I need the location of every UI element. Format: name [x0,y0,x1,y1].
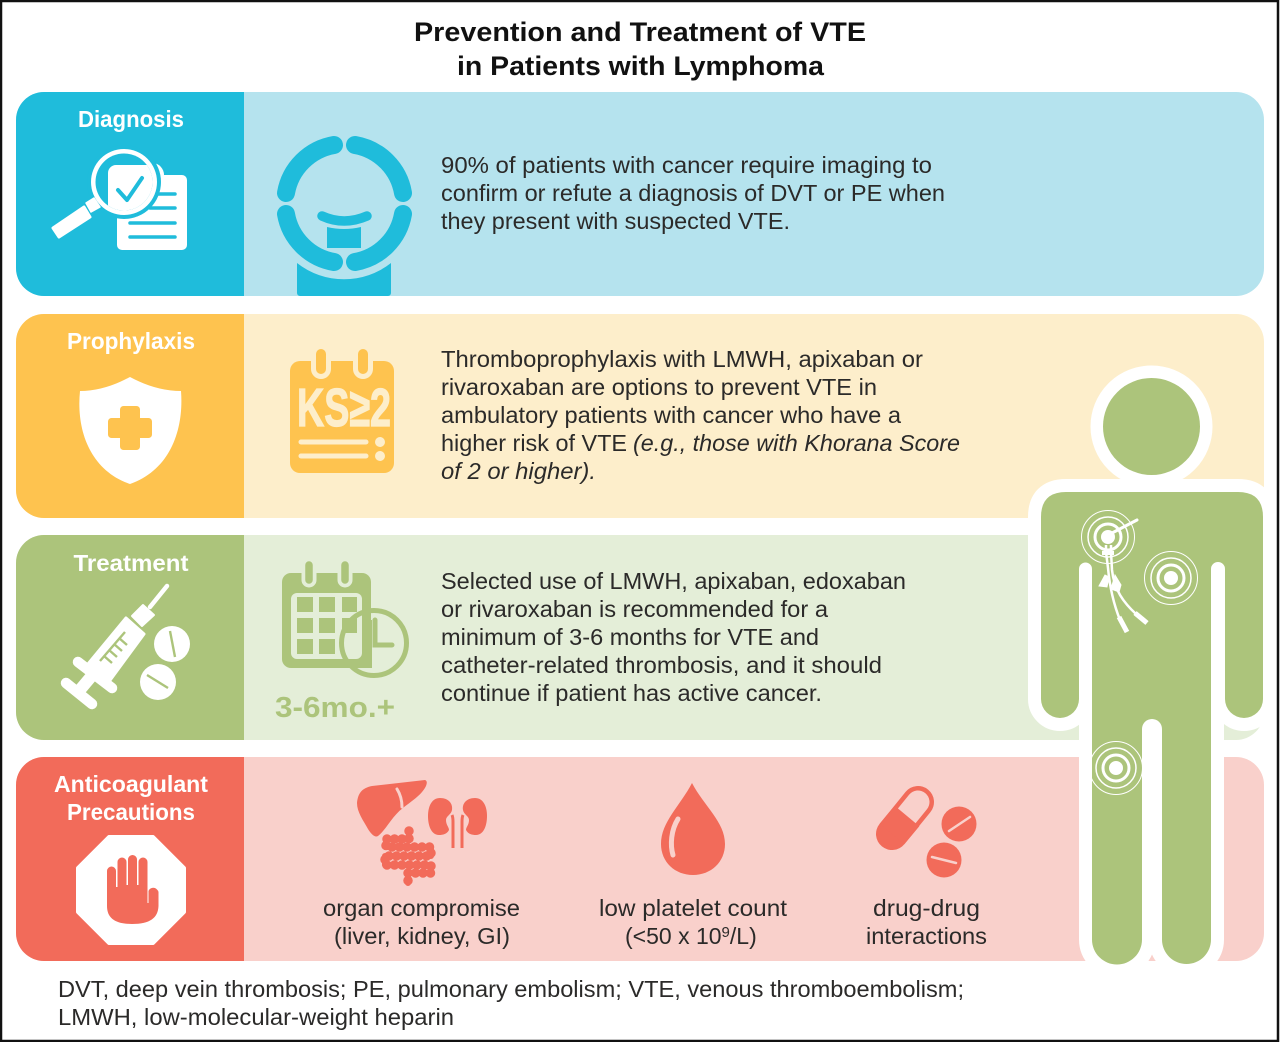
text: treatment: or rivaroxaban is recommended for a [441,596,828,622]
icon: liver, kidneys, intestine [357,780,487,883]
text: diagnosis: confirm or refute a diagnosis of DVT or PE when [441,180,945,206]
heading: anticoagulant precautions: Precautions [67,799,195,825]
icon: syringe and pills [66,586,190,704]
heading: treatment: Treatment [74,550,189,576]
text: prophylaxis: of 2 or higher). [441,458,596,484]
text: drug-drug interactions: interactions [866,923,987,949]
title: in Patients with Lymphoma [457,51,825,81]
title: Prevention and Treatment of VTE [414,17,866,47]
text: low platelet count: 9 [722,924,730,941]
title [414,17,866,81]
icon: calendar Khorana score: KS≥2 [297,378,391,438]
text: treatment: catheter-related thrombosis, and it should [441,652,882,678]
text: diagnosis: 90% of patients with cancer require imaging to [441,152,932,178]
heading: diagnosis: Diagnosis [78,106,184,132]
text: treatment: minimum of 3-6 months for VTE and [441,624,819,650]
body: head [1103,378,1200,475]
text: prophylaxis: ambulatory patients with cancer who have a [441,402,901,428]
heading: anticoagulant precautions: Anticoagulant [54,771,208,797]
icon: magnifier over document [53,145,187,250]
panel: treatment [16,535,1264,740]
icon: stop sign with hand [78,837,184,943]
figure: patient body with thrombosis sites [1041,378,1263,964]
icon: blood drop [661,783,725,875]
footnote: DVT, deep vein thrombosis; PE, pulmonary embolism; VTE, venous thromboembolism; [58,976,964,1002]
panel: diagnosis [16,92,1264,296]
label: duration: 3-6mo.+ [275,692,395,724]
icon: calendar and clock [282,565,406,676]
text: prophylaxis: rivaroxaban are options to prevent VTE in [441,374,877,400]
thrombosis site: chest [1144,552,1198,604]
text: prophylaxis: higher risk of VTE [441,430,627,456]
icon: calendar Khorana score [290,354,394,473]
footnote: LMWH, low-molecular-weight heparin [58,1004,454,1030]
text: treatment: continue if patient has active cancer. [441,680,822,706]
heading: anticoagulant precautions [54,771,208,825]
text: low platelet count: (<50 x 10 [625,923,722,949]
text: organ compromise: (liver, kidney, GI) [334,923,510,949]
text: diagnosis: they present with suspected VTE. [441,208,790,234]
text: prophylaxis: Thromboprophylaxis with LMWH, apixaban or [441,346,923,372]
text: low platelet count [599,895,788,949]
text: organ compromise [323,895,520,949]
text: organ compromise: organ compromise [323,895,520,921]
text: diagnosis [441,152,945,234]
icon: capsule and pills [892,802,976,878]
body: torso, arms and legs [1041,492,1263,964]
text: treatment: Selected use of LMWH, apixaban, edoxaban [441,568,906,594]
text: prophylaxis: (e.g., those with Khorana Score [633,430,960,456]
text: drug-drug interactions: drug-drug [873,895,980,921]
panel: prophylaxis [16,314,1264,518]
thrombosis site: catheter-related [1082,510,1147,632]
text: low platelet count: low platelet count [599,895,788,921]
heading: prophylaxis: Prophylaxis [67,328,195,354]
icon: CT scanner [286,145,403,296]
text: low platelet count: /L) [730,923,757,949]
panel: anticoagulant precautions [16,757,1264,961]
icon: shield with cross [79,377,181,484]
text: drug-drug interactions [866,895,987,949]
footnote [58,976,964,1030]
text: prophylaxis [441,346,960,484]
thrombosis site: leg [1090,742,1142,794]
text: treatment [441,568,906,706]
